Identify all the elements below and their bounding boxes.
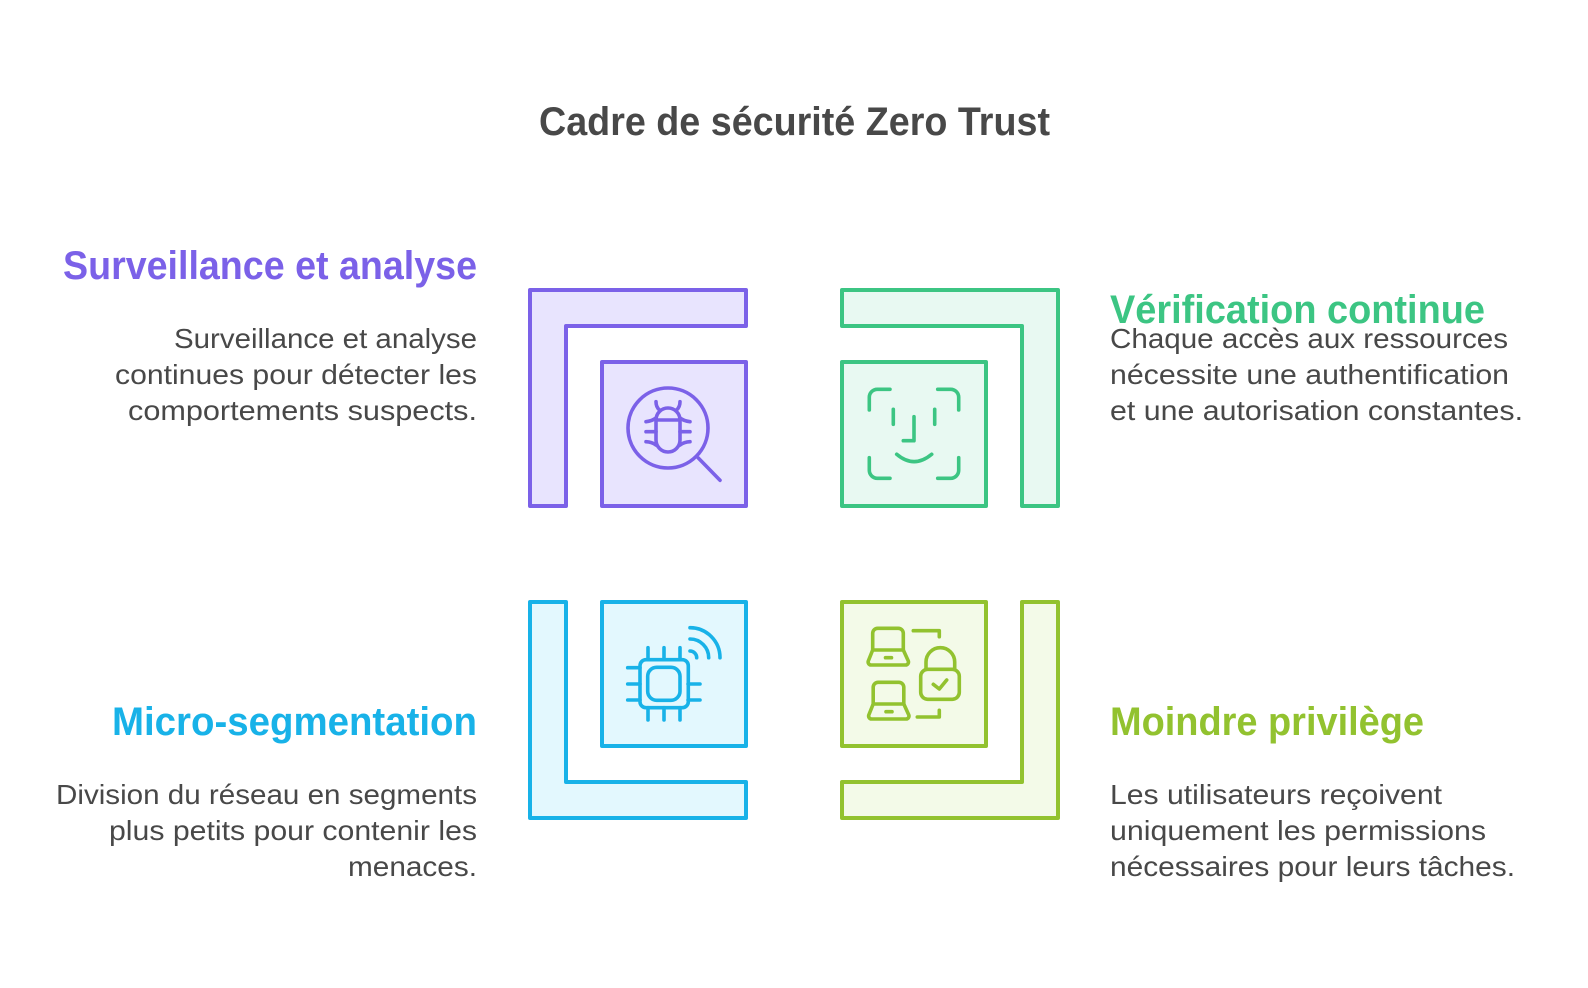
text block: vérification description: [1110, 323, 1523, 426]
heading: vérification: Vérification continue: [1110, 288, 1485, 332]
text block: moindre privilège description: nécessaires pour leurs tâches.: [1110, 851, 1515, 882]
heading: micro-segmentation: Micro-segmentation: [112, 700, 477, 744]
text block: micro-segmentation description: [56, 779, 477, 882]
text block: surveillance description: continues pour détecter les: [115, 359, 477, 390]
text block: vérification description: nécessite une authentification: [1110, 359, 1509, 390]
text block: surveillance description: Surveillance et analyse: [174, 323, 477, 354]
text block: micro-segmentation description: Division du réseau en segments: [56, 779, 477, 810]
text block: surveillance description: [115, 323, 477, 426]
square: lime: [842, 602, 986, 746]
icon: laptops and padlock: [868, 628, 959, 719]
panel: moindre privilège: [842, 602, 1515, 882]
text block: micro-segmentation description: menaces.: [348, 851, 477, 882]
text block: vérification description: Chaque accès aux ressources: [1110, 323, 1508, 354]
panel: vérification continue: [842, 288, 1523, 506]
corner bracket: purple: [530, 290, 746, 506]
panel: micro-segmentation: [56, 602, 746, 882]
panel: surveillance et analyse: [63, 244, 746, 506]
heading: surveillance: Surveillance et analyse: [63, 244, 477, 288]
text block: moindre privilège description: [1110, 779, 1515, 882]
text block: surveillance description: comportements suspects.: [128, 395, 477, 426]
heading: moindre privilège: Moindre privilège: [1110, 700, 1424, 744]
text block: moindre privilège description: Les utilisateurs reçoivent: [1110, 779, 1442, 810]
corner bracket: green: [842, 290, 1058, 506]
corner bracket: blue: [530, 602, 746, 818]
icon: wireless chip: [628, 628, 720, 720]
text block: vérification description: et une autorisation constantes.: [1110, 395, 1523, 426]
corner bracket: lime: [842, 602, 1058, 818]
square: blue: [602, 602, 746, 746]
square: purple: [602, 362, 746, 506]
title: Cadre de sécurité Zero Trust: [539, 100, 1050, 144]
text block: micro-segmentation description: plus petits pour contenir les: [109, 815, 477, 846]
square: green: [842, 362, 986, 506]
icon: bug under magnifying glass: [628, 388, 720, 480]
icon: face recognition: [869, 389, 959, 478]
text block: moindre privilège description: uniquement les permissions: [1110, 815, 1486, 846]
